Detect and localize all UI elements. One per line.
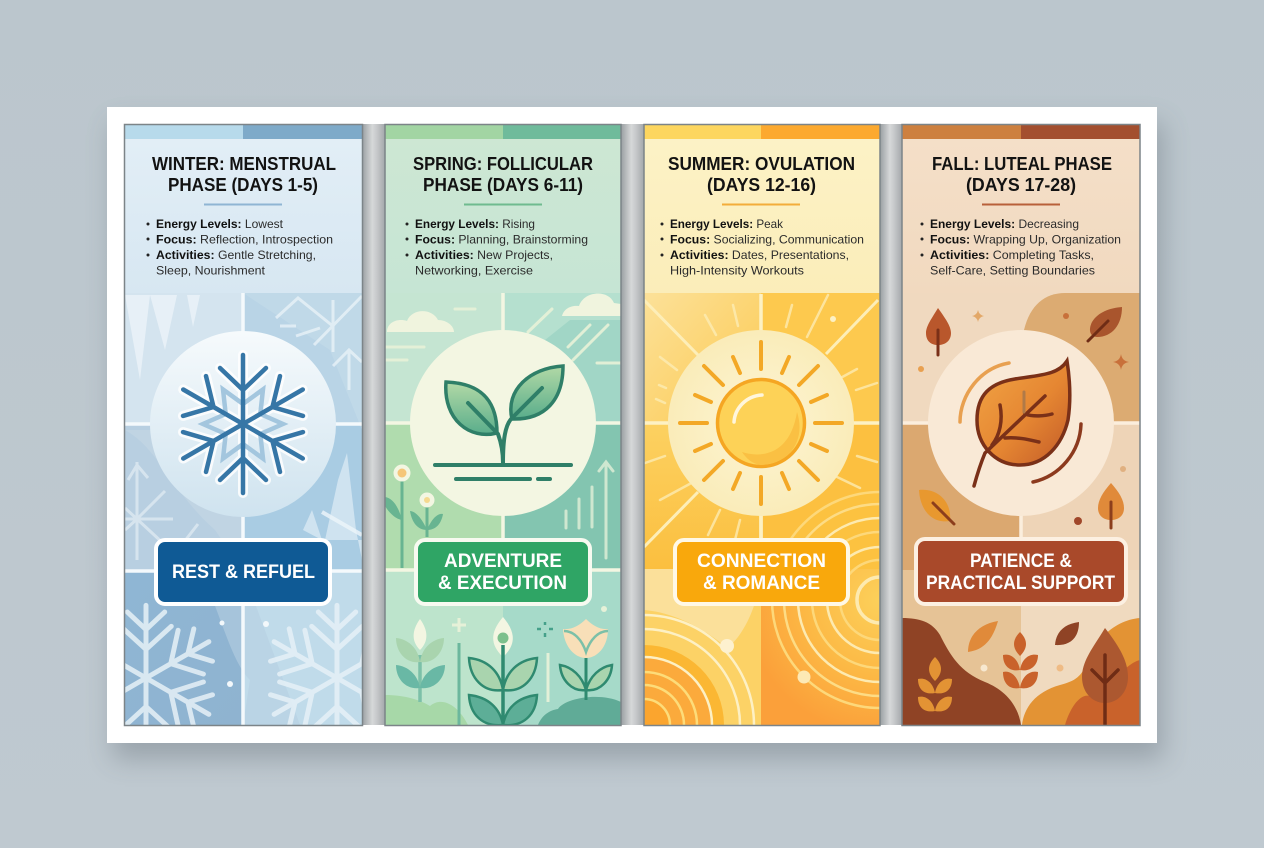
- infographic: [124, 124, 1141, 726]
- spring bullet list: Focus: Planning, Brainstorming: [415, 232, 588, 246]
- winter header: [124, 124, 362, 293]
- spring illustration background: [385, 293, 621, 725]
- fall bullet list: Energy Levels: Decreasing: [930, 217, 1079, 231]
- fall badge: PRACTICAL SUPPORT: [926, 573, 1115, 594]
- summer badge: [675, 540, 848, 604]
- fall badge: [916, 539, 1126, 604]
- hills: [385, 695, 468, 725]
- summer circle: [668, 330, 854, 516]
- spring bullet list: [406, 217, 588, 278]
- fall bullet list: Self-Care, Setting Boundaries: [930, 264, 1095, 278]
- panel: summer: [643, 124, 881, 726]
- fall title: (DAYS 17-28): [966, 175, 1076, 195]
- winter bullet list: Energy Levels: Lowest: [156, 217, 284, 231]
- summer badge: & ROMANCE: [703, 573, 820, 594]
- summer bullet list: Energy Levels: Peak: [670, 217, 784, 231]
- small leaves: [926, 308, 951, 345]
- spring badge: ADVENTURE: [444, 551, 562, 572]
- fall title: FALL: LUTEAL PHASE: [932, 154, 1112, 174]
- spring badge: & EXECUTION: [438, 573, 567, 594]
- spring title: SPRING: FOLLICULAR: [413, 154, 593, 174]
- winter title: [152, 154, 336, 195]
- spring title: [413, 154, 593, 195]
- spring header: [385, 124, 621, 293]
- fall illustration background: [902, 293, 1140, 725]
- fall badge: PATIENCE &: [970, 551, 1072, 572]
- left flowers: [402, 480, 427, 568]
- summer illustration background: [644, 293, 880, 725]
- winter circle: [150, 331, 336, 517]
- spring circle: [410, 330, 596, 516]
- fall circle: [928, 330, 1114, 516]
- spring badge: [416, 540, 590, 604]
- plants: [418, 655, 422, 702]
- spring title: PHASE (DAYS 6-11): [423, 175, 583, 195]
- bottom right arcs: [761, 490, 880, 569]
- spring bullet list: Networking, Exercise: [415, 264, 533, 278]
- fall bullet list: Focus: Wrapping Up, Organization: [930, 232, 1121, 246]
- summer badge: CONNECTION: [697, 551, 826, 572]
- spring bullet list: Activities: New Projects,: [415, 248, 553, 262]
- summer bullet list: Activities: Dates, Presentations,: [670, 248, 849, 262]
- panel: winter: [124, 124, 364, 726]
- summer bullet list: High-Intensity Workouts: [670, 264, 804, 278]
- metal dividers: [362, 124, 902, 725]
- fall header: [902, 124, 1140, 293]
- summer title: (DAYS 12-16): [707, 175, 816, 195]
- clouds: [387, 311, 454, 332]
- winter illustration background: [125, 293, 362, 725]
- winter badge: REST & REFUEL: [172, 562, 315, 583]
- bottom left arcs: [644, 645, 724, 725]
- winter bullet list: [146, 217, 333, 278]
- panel: fall: [902, 124, 1140, 726]
- panel: spring: [385, 124, 621, 726]
- spring bullet list: Energy Levels: Rising: [415, 217, 535, 231]
- winter title: PHASE (DAYS 1-5): [168, 175, 318, 195]
- icon: snowflake: [172, 355, 314, 493]
- icon: sun: [680, 342, 842, 504]
- winter bullet list: Activities: Gentle Stretching,: [156, 248, 316, 262]
- winter title: WINTER: MENSTRUAL: [152, 154, 336, 174]
- winter badge: [156, 540, 330, 604]
- summer bullet list: Focus: Socializing, Communication: [670, 232, 864, 246]
- fall bullet list: [920, 217, 1121, 278]
- summer header: [644, 124, 880, 294]
- summer title: SUMMER: OVULATION: [668, 154, 855, 174]
- summer title: [668, 154, 855, 195]
- growth arrow and bars: [566, 462, 613, 558]
- winter bullet list: Focus: Reflection, Introspection: [156, 232, 333, 246]
- sparkles and dots: [972, 310, 984, 322]
- icon: sprout: [435, 366, 571, 479]
- winter bullet list: Sleep, Nourishment: [156, 264, 266, 278]
- wheat sprigs: [1003, 632, 1038, 688]
- fall bullet list: Activities: Completing Tasks,: [930, 248, 1094, 262]
- fall title: [932, 154, 1112, 195]
- icon: autumn leaf: [960, 361, 1081, 486]
- white card: [107, 107, 1157, 743]
- summer bullet list: [660, 217, 864, 278]
